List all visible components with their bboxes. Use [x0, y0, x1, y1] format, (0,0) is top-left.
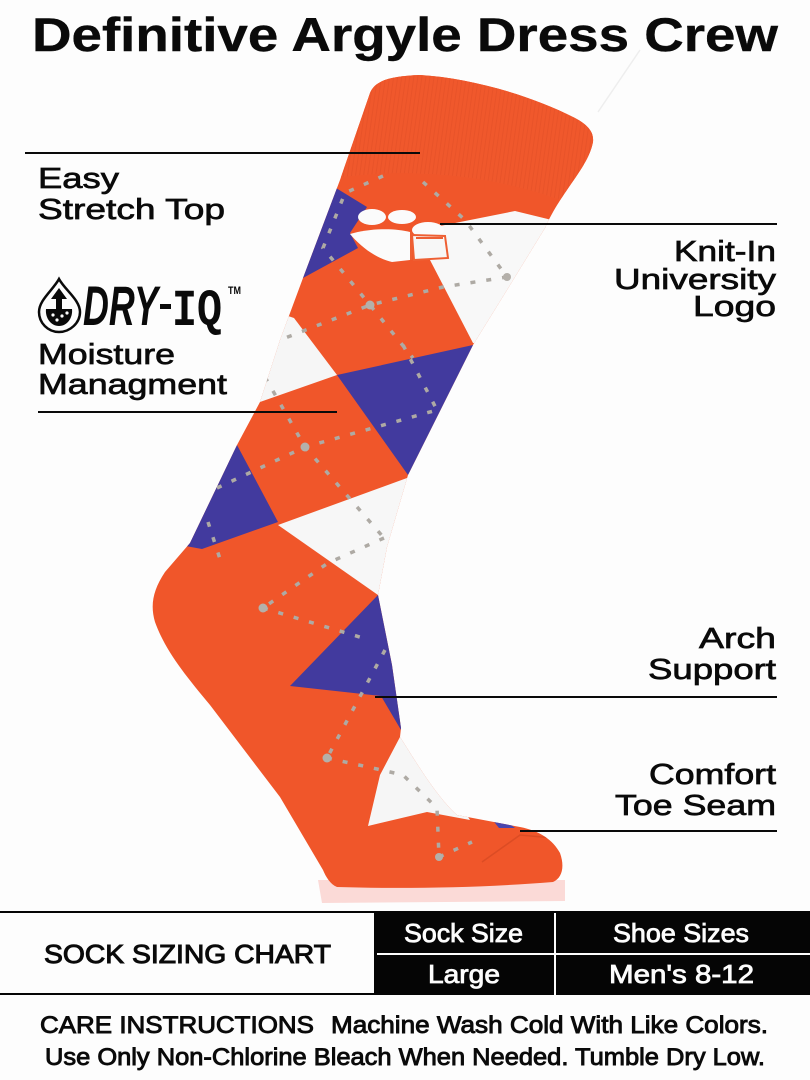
hanging thread: [598, 50, 640, 112]
lower left blue diamond: [180, 445, 278, 549]
care instructions: CARE INSTRUCTIONS: [40, 1012, 314, 1039]
label: moisture management: [38, 339, 227, 401]
label: moisture management: Managment: [38, 369, 227, 401]
toe blue accent: [494, 822, 515, 828]
upper left blue diamond: [303, 188, 367, 278]
label: arch support: Support: [648, 654, 776, 686]
argyle cross stitches: [258, 273, 511, 861]
callout line: easy stretch top: [25, 152, 420, 154]
label: comfort toe seam: [615, 759, 776, 822]
sock sizing chart: Sock Size: [404, 918, 523, 948]
logo wordmark: dry-iq: DRY: [83, 274, 161, 337]
lower white diamond: [278, 478, 407, 595]
sock sizing chart: Shoe Sizes: [613, 918, 749, 948]
label: comfort toe seam: Toe Seam: [615, 790, 776, 822]
logo wordmark: dry-iq: TM: [228, 285, 241, 297]
title: Definitive Argyle Dress Crew: [32, 8, 779, 61]
logo wordmark: dry-iq: [83, 274, 241, 341]
knit-in paw logo: [350, 209, 448, 262]
label: knit-in university logo: University: [614, 264, 777, 296]
label: easy stretch top: Stretch Top: [38, 194, 225, 226]
toe white diamond: [368, 737, 470, 826]
callout line: moisture management: [38, 411, 337, 413]
care instructions: Use Only Non-Chlorine Bleach When Needed. Tumble Dry Low.: [45, 1044, 765, 1071]
icon: dry-iq moisture drop: [39, 279, 80, 332]
label: easy stretch top: Easy: [38, 163, 120, 195]
label: comfort toe seam: Comfort: [649, 759, 776, 791]
toe seam: [482, 835, 553, 862]
middle blue diamond: [337, 345, 473, 475]
label: knit-in university logo: [614, 236, 777, 323]
label: easy stretch top: [38, 163, 225, 226]
foot blue diamond: [290, 595, 410, 730]
sock reflection: [318, 880, 565, 903]
sock body: [140, 60, 610, 900]
callout line: toe seam: [520, 830, 777, 832]
sock illustration: [140, 60, 610, 900]
label: moisture management: Moisture: [38, 339, 175, 371]
middle left white diamond: [260, 316, 337, 402]
callout line: arch support: [375, 696, 777, 698]
cuff ribbing: [340, 75, 594, 200]
argyle stitch lines: [208, 176, 507, 857]
label: arch support: Arch: [699, 623, 776, 655]
label: knit-in university logo: Knit-In: [674, 236, 776, 268]
sock sizing chart: [0, 911, 810, 995]
upper right white diamond: [430, 211, 549, 344]
callout line: knit-in logo: [440, 223, 777, 225]
care instructions: Machine Wash Cold With Like Colors.: [331, 1012, 768, 1039]
logo wordmark: dry-iq: IQ: [172, 282, 222, 341]
sock sizing chart: Large: [428, 959, 500, 989]
label: knit-in university logo: Logo: [693, 291, 776, 323]
label: arch support: [648, 623, 776, 686]
sock sizing chart: SOCK SIZING CHART: [44, 939, 331, 969]
care instructions: [40, 1012, 768, 1071]
sock sizing chart: Men's 8-12: [609, 959, 754, 989]
